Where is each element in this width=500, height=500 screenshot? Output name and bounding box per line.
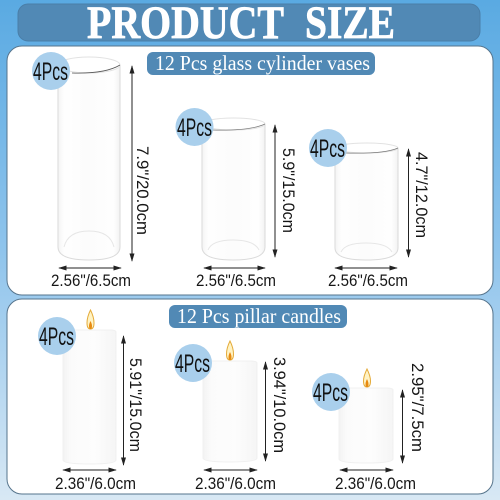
width label: large candle: 2.36"/6.0cm xyxy=(55,475,136,493)
badge: large candle xyxy=(38,317,76,355)
badge: medium vase xyxy=(176,108,214,146)
badge: large candle: 4Pcs xyxy=(39,323,74,351)
panel: pillar candles xyxy=(7,299,493,494)
height label: medium vase: 5.9"/15.0cm xyxy=(279,148,297,233)
width arrow: medium vase xyxy=(204,267,265,269)
height label: large vase: 7.9"/20.0cm xyxy=(133,146,151,235)
height label: medium candle: 3.94"/10.0cm xyxy=(270,357,288,453)
badge: medium candle: 4Pcs xyxy=(175,350,210,378)
height arrow: medium vase xyxy=(274,125,276,257)
width arrow: medium candle xyxy=(204,469,257,471)
height arrow: small vase xyxy=(408,149,410,257)
width arrow: large candle xyxy=(63,469,116,471)
medium vase xyxy=(202,118,265,260)
height arrow: large vase xyxy=(131,66,133,261)
height label: small vase: 4.7"/12.0cm xyxy=(412,152,430,238)
width label: large vase: 2.56"/6.5cm xyxy=(51,272,131,290)
width label: small vase: 2.56"/6.5cm xyxy=(328,272,408,290)
large vase xyxy=(58,57,120,260)
badge: medium candle xyxy=(174,344,212,382)
height arrow: small candle xyxy=(402,390,404,463)
badge: small candle: 4Pcs xyxy=(313,379,348,407)
heading: candles: 12 Pcs pillar candles xyxy=(177,304,341,328)
badge: medium vase: 4Pcs xyxy=(177,114,212,142)
width arrow: small candle xyxy=(340,469,393,471)
width arrow: small vase xyxy=(335,267,397,269)
small candle xyxy=(339,369,393,463)
height arrow: large candle xyxy=(122,336,124,465)
badge: large vase: 4Pcs xyxy=(33,58,68,86)
height label: large candle: 5.91"/15.0cm xyxy=(126,358,144,452)
badge: small vase xyxy=(309,129,347,167)
panel: glass cylinder vases xyxy=(7,46,493,295)
large candle xyxy=(63,310,116,464)
badge: small candle xyxy=(312,373,350,411)
width label: medium vase: 2.56"/6.5cm xyxy=(196,272,276,290)
small vase xyxy=(335,143,398,260)
medium candle xyxy=(203,341,257,462)
width label: small candle: 2.36"/6.0cm xyxy=(335,475,416,493)
height arrow: medium candle xyxy=(264,362,266,461)
height label: small candle: 2.95"/7.5cm xyxy=(408,363,426,452)
badge: large vase xyxy=(32,52,70,90)
title banner xyxy=(18,0,480,49)
heading: vases: 12 Pcs glass cylinder vases xyxy=(155,51,370,75)
width arrow: large vase xyxy=(59,267,121,269)
badge: small vase: 4Pcs xyxy=(310,135,345,163)
width label: medium candle: 2.36"/6.0cm xyxy=(195,475,276,493)
